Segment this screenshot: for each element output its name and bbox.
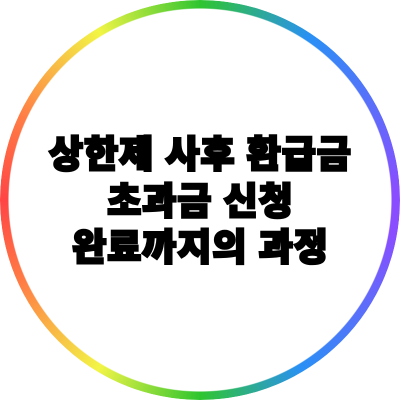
title: 상한제 사후 환급금	[49, 134, 352, 175]
title: 초과금 신청	[107, 180, 294, 222]
title: 완료까지의 과정	[72, 227, 329, 268]
title	[48, 134, 352, 268]
